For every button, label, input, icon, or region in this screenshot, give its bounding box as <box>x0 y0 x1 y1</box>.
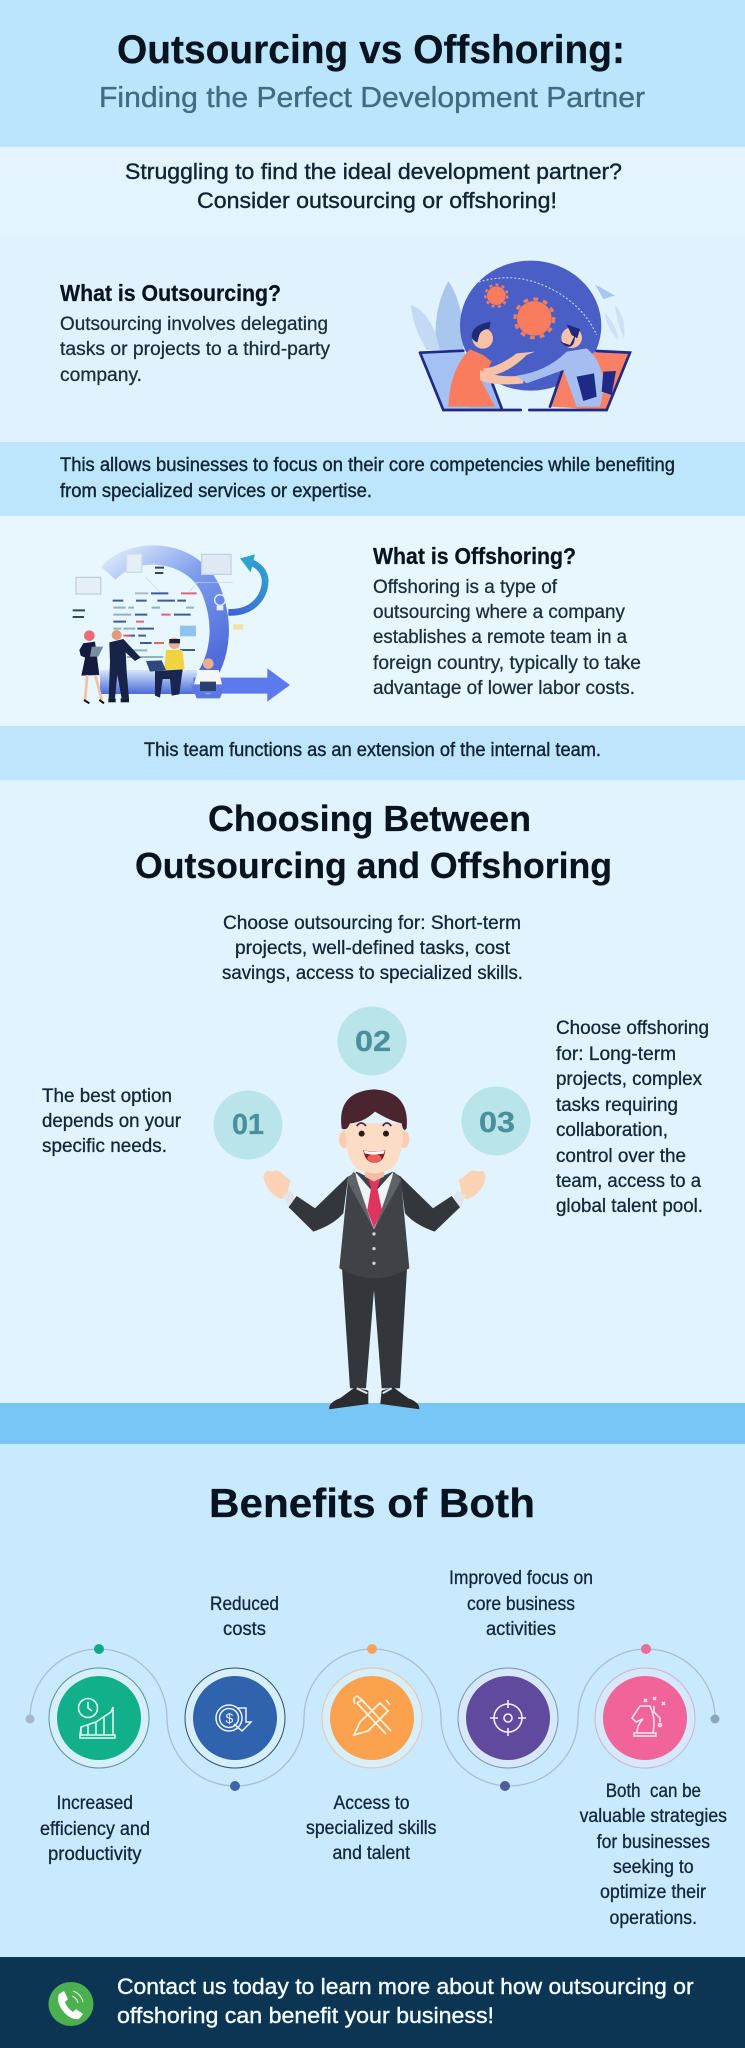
outsourcing description: company. <box>60 364 142 386</box>
icon: efficiency growth <box>49 1668 149 1768</box>
band: floor strip <box>0 1403 745 1444</box>
band: core competencies: This allows businesses to focus on their core competencies while benefiting <box>60 454 675 476</box>
band: team extension: This team functions as an extension of the internal team. <box>144 739 601 761</box>
label: both strategies: for businesses <box>597 1831 710 1853</box>
illustration: remote team with process arrows <box>73 554 290 703</box>
number badge 02: 02 <box>355 1026 391 1058</box>
panel: intro <box>0 147 745 237</box>
seated man with laptop <box>169 638 180 649</box>
outsourcing description: Outsourcing involves delegating <box>60 313 328 335</box>
label: specialized skills: Access to <box>334 1792 410 1814</box>
offshoring description: foreign country, typically to take <box>373 652 641 674</box>
subtitle: Finding the Perfect Development Partner <box>99 82 646 114</box>
number badge 01: 01 <box>232 1109 264 1141</box>
heading: choosing between: Outsourcing and Offshoring <box>135 845 612 886</box>
panel: contact footer <box>0 1957 745 2048</box>
illustration: businessman <box>263 1089 486 1409</box>
heading: choosing between: Choosing Between <box>208 798 531 839</box>
label: reduced costs: costs <box>223 1618 266 1640</box>
label: both strategies <box>580 1780 727 1929</box>
text: choose offshoring: Choose offshoring <box>556 1017 709 1039</box>
text: choose offshoring: control over the <box>556 1145 686 1167</box>
outsourcing description: tasks or projects to a third-party <box>60 338 330 360</box>
outsourcing description <box>60 313 330 386</box>
label: increased efficiency: productivity <box>48 1843 142 1865</box>
text: best option: specific needs. <box>42 1135 167 1157</box>
label: both strategies: seeking to <box>613 1856 694 1878</box>
number badge 03: 03 <box>479 1107 515 1139</box>
label: increased efficiency: efficiency and <box>40 1818 150 1840</box>
icon: target <box>458 1668 558 1768</box>
label: improved focus: core business <box>467 1593 575 1615</box>
text: choose outsourcing: savings, access to specialized skills. <box>222 962 523 984</box>
heading: benefits of both: Benefits of Both <box>209 1480 535 1526</box>
label: specialized skills: and talent <box>332 1842 411 1864</box>
call to action text <box>117 1974 694 2028</box>
text: choose outsourcing: Choose outsourcing for: Short-term <box>223 912 521 934</box>
call to action text: offshoring can benefit your business! <box>117 2003 494 2028</box>
text: best option <box>42 1085 181 1157</box>
number badge 02 <box>338 1006 406 1076</box>
label: both strategies: Both can be <box>606 1780 701 1802</box>
offshoring description: establishes a remote team in a <box>373 626 627 648</box>
intro line 1: Struggling to find the ideal development partner? <box>125 159 622 184</box>
icon: strategy chess knight <box>595 1668 695 1768</box>
heading: choosing between <box>135 798 612 886</box>
label: both strategies: optimize their <box>600 1881 706 1903</box>
wave connector <box>26 1644 720 1791</box>
text: choose offshoring: collaboration, <box>556 1119 668 1141</box>
icon: specialized tools <box>322 1668 422 1768</box>
panel: header <box>0 0 745 147</box>
text: best option: depends on your <box>42 1110 181 1132</box>
text: choose offshoring: global talent pool. <box>556 1195 703 1217</box>
band: team extension <box>0 726 745 780</box>
intro line 2: Consider outsourcing or offshoring! <box>197 188 557 213</box>
label: both strategies: operations. <box>610 1907 697 1929</box>
panel: benefits of both <box>0 1444 745 1957</box>
label: improved focus: activities <box>486 1618 556 1640</box>
offshoring description: Offshoring is a type of <box>373 576 558 598</box>
number badge 03 <box>462 1086 530 1156</box>
offshoring description: outsourcing where a company <box>373 601 625 623</box>
icon: phone <box>48 1982 94 2026</box>
panel: choosing between <box>0 780 745 1409</box>
label: reduced costs <box>210 1593 279 1640</box>
label: both strategies: valuable strategies <box>580 1805 727 1827</box>
text: choose offshoring: projects, complex <box>556 1068 702 1090</box>
call to action text: Contact us today to learn more about how outsourcing or <box>117 1974 694 1999</box>
panel: what is outsourcing <box>0 237 745 442</box>
band: core competencies: from specialized services or expertise. <box>60 480 372 502</box>
band: core competencies <box>0 442 745 516</box>
title: Outsourcing vs Offshoring: <box>117 28 625 72</box>
label: increased efficiency <box>40 1792 150 1865</box>
heading: what is outsourcing: What is Outsourcing? <box>60 280 281 306</box>
text: choose offshoring <box>556 1017 709 1217</box>
icon: reduced costs <box>185 1668 285 1768</box>
text: choose offshoring: tasks requiring <box>556 1094 678 1116</box>
text: choose outsourcing <box>222 912 523 984</box>
text: choose offshoring: team, access to a <box>556 1170 701 1192</box>
illustration: handshake through laptops <box>411 261 630 410</box>
panel: what is offshoring <box>0 516 745 726</box>
offshoring description <box>373 576 641 699</box>
label: increased efficiency: Increased <box>56 1792 133 1814</box>
label: improved focus: Improved focus on <box>449 1567 593 1589</box>
label: specialized skills: specialized skills <box>306 1817 437 1839</box>
label: improved focus <box>449 1567 593 1640</box>
sitting man <box>203 658 214 669</box>
text: best option: The best option <box>42 1085 172 1107</box>
icon: reduced costs: $ <box>226 1710 234 1726</box>
number badge 01 <box>214 1090 282 1160</box>
text: choose offshoring: for: Long-term <box>556 1043 676 1065</box>
text: choose outsourcing: projects, well-defined tasks, cost <box>235 937 511 959</box>
standing man <box>112 630 122 640</box>
label: specialized skills <box>306 1792 437 1864</box>
offshoring description: advantage of lower labor costs. <box>373 677 635 699</box>
woman <box>84 630 95 641</box>
heading: what is offshoring: What is Offshoring? <box>373 543 576 569</box>
label: reduced costs: Reduced <box>210 1593 279 1615</box>
